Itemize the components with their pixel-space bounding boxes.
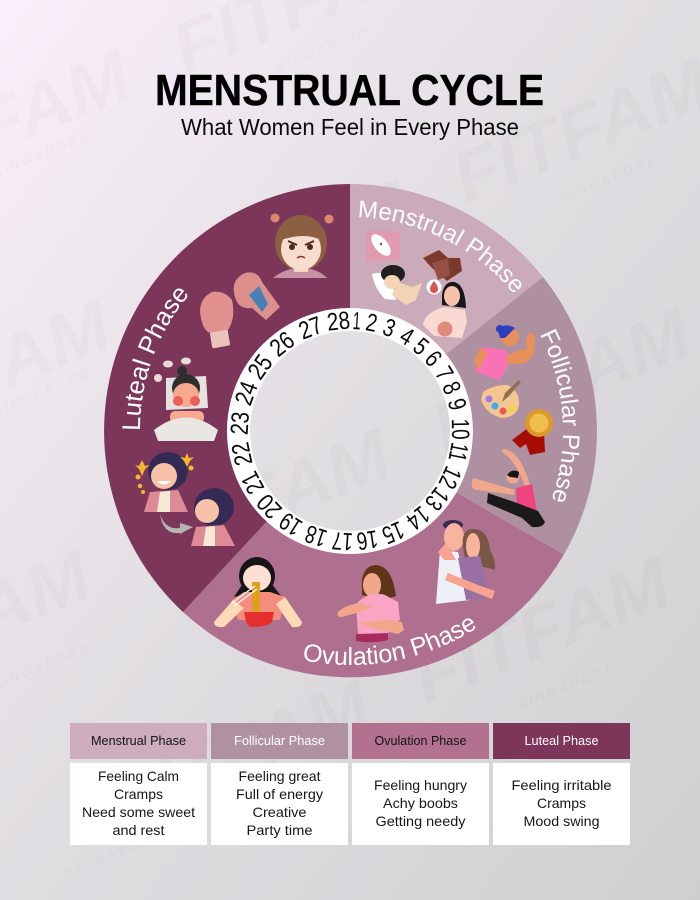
- table: phase summary: [70, 723, 630, 845]
- panel: ovulation phase segment: [183, 491, 564, 677]
- column: follicular: Feeling great: [238, 768, 321, 784]
- day numbers: 18: [302, 519, 330, 552]
- subtitle: What Women Feel in Every Phase: [181, 114, 519, 140]
- day numbers: 1: [352, 307, 362, 335]
- day numbers: 3: [379, 313, 399, 343]
- icon: angry woman: [270, 214, 334, 278]
- column: luteal: Feeling irritable: [512, 777, 612, 793]
- day numbers: 23: [225, 411, 255, 436]
- day numbers: 17: [331, 526, 354, 555]
- day numbers: 5: [407, 332, 434, 361]
- day numbers: 24: [230, 378, 264, 409]
- watermark pattern: SINGAPORE: [516, 660, 618, 713]
- watermark pattern: FITFAM: [101, 664, 383, 840]
- day numbers: 15: [378, 515, 408, 549]
- day numbers: 27: [295, 311, 326, 345]
- panel: follicular phase segment: [444, 277, 597, 554]
- icon: blood drop bubble: [426, 280, 442, 294]
- icon: woman with pink ribbon: [338, 565, 404, 642]
- watermark pattern: FITFAM: [401, 543, 683, 719]
- column: menstrual: Cramps: [114, 786, 163, 802]
- cycle wheel: [104, 184, 597, 678]
- column: luteal: Luteal Phase: [524, 734, 599, 748]
- day numbers: 16: [355, 524, 380, 555]
- day numbers: 26: [265, 326, 300, 362]
- day numbers: 19: [275, 506, 307, 541]
- icon: flexing woman: [474, 325, 535, 380]
- day numbers: 22: [226, 440, 258, 468]
- day numbers: 21: [236, 467, 270, 498]
- column: luteal: Mood swing: [524, 813, 600, 829]
- watermark pattern: FITFAM: [121, 414, 403, 590]
- day numbers: 6: [419, 345, 447, 372]
- label: ovulation phase: Ovulation Phase: [304, 618, 476, 666]
- column: ovulation: Achy boobs: [383, 795, 458, 811]
- day numbers: 9: [442, 396, 472, 413]
- panel: menstrual phase segment: [350, 184, 543, 356]
- icon: chocolate: [423, 250, 462, 281]
- icon: boxing gloves: [200, 272, 280, 348]
- column: luteal: [493, 723, 630, 845]
- column: ovulation: [352, 723, 489, 845]
- column: menstrual: Feeling Calm: [98, 768, 179, 784]
- column: follicular: Creative: [252, 804, 307, 820]
- icon: woman stretching: [472, 449, 545, 527]
- icon: woman eating noodles: [214, 557, 302, 627]
- column: follicular: Full of energy: [236, 786, 323, 802]
- icon: sanitary pad box: [366, 231, 400, 261]
- column: menstrual: Menstrual Phase: [91, 734, 186, 748]
- column: menstrual: and rest: [112, 822, 165, 838]
- day numbers: 14: [401, 500, 435, 535]
- watermark pattern: FITFAM: [141, 164, 423, 340]
- label: menstrual phase: Menstrual Phase: [359, 200, 522, 292]
- column: luteal: Cramps: [537, 795, 586, 811]
- icon: mood swing women: [135, 452, 235, 546]
- title: MENSTRUAL CYCLE: [155, 66, 544, 115]
- column: ovulation: Ovulation Phase: [374, 734, 467, 748]
- icon: gold medal: [512, 409, 553, 455]
- watermark pattern: SINGAPORE: [274, 22, 376, 75]
- label: follicular phase: Follicular Phase: [540, 328, 580, 502]
- icon: sleepless woman in bed: [154, 358, 218, 441]
- watermark pattern: FITFAM: [421, 293, 700, 469]
- watermark pattern: SINGAPORE: [64, 828, 166, 881]
- column: ovulation: Getting needy: [376, 813, 466, 829]
- column: follicular: Follicular Phase: [234, 734, 325, 748]
- column: follicular: Party time: [246, 822, 313, 838]
- icon: paint palette: [481, 380, 521, 418]
- day numbers: 2: [363, 308, 380, 338]
- panel: luteal phase segment: [104, 184, 350, 612]
- column: menstrual: Need some sweet: [82, 804, 195, 820]
- day number ring: [227, 308, 473, 554]
- day numbers: [225, 306, 474, 555]
- day numbers: 12: [433, 462, 467, 493]
- day numbers: 11: [443, 440, 473, 463]
- day numbers: 20: [251, 488, 288, 524]
- column: ovulation: Feeling hungry: [374, 777, 467, 793]
- column: follicular: [211, 723, 348, 845]
- day numbers: 7: [429, 362, 459, 386]
- day numbers: 4: [395, 322, 419, 352]
- icon: couple hugging: [436, 520, 495, 604]
- column: menstrual: [70, 723, 207, 845]
- icon: woman with stomach cramp: [423, 282, 467, 338]
- icon: sleeping woman: [372, 265, 422, 305]
- day numbers: 25: [242, 350, 279, 385]
- day numbers: 13: [419, 482, 454, 516]
- day numbers: 28: [326, 306, 351, 337]
- label: luteal phase: Luteal Phase: [122, 288, 188, 429]
- day numbers: 10: [446, 418, 474, 440]
- day numbers: 8: [436, 377, 466, 399]
- watermark pattern: SINGAPORE: [558, 152, 660, 205]
